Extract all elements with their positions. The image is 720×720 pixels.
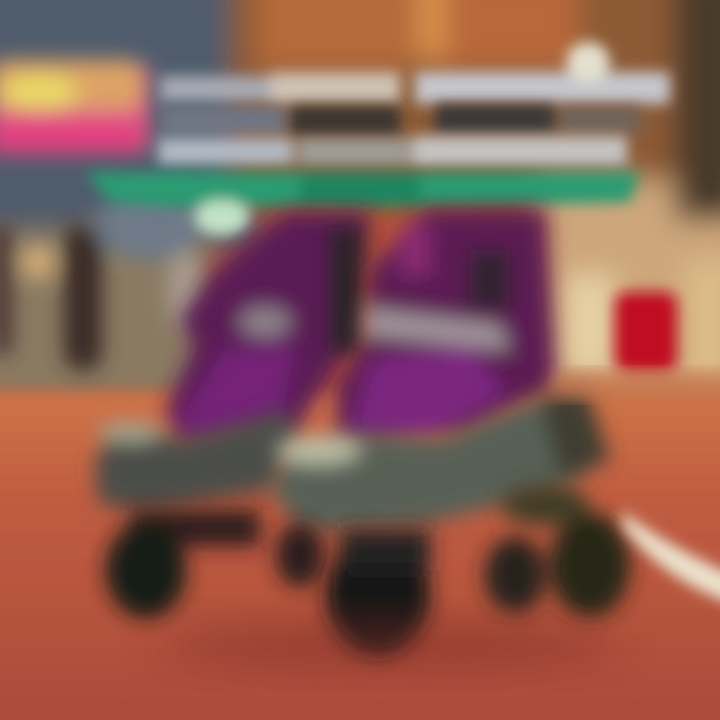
ground shadow — [160, 621, 620, 669]
white floor stripe — [620, 510, 720, 606]
striped sock band: upper light stripe — [160, 42, 670, 104]
green band — [85, 172, 640, 236]
left skate wheels — [106, 510, 324, 618]
lower light stripe — [158, 136, 627, 166]
legs — [255, 0, 580, 70]
background figures — [0, 190, 205, 370]
neon sign — [0, 60, 150, 154]
left skate upper — [165, 212, 370, 445]
red object — [615, 292, 677, 372]
wall base — [555, 375, 720, 395]
right skate upper — [335, 210, 555, 445]
left skate sole and toe — [95, 410, 300, 510]
right skate sole and toe — [272, 385, 610, 530]
right skate wheels — [326, 485, 630, 655]
dark sock stripes — [160, 104, 640, 136]
